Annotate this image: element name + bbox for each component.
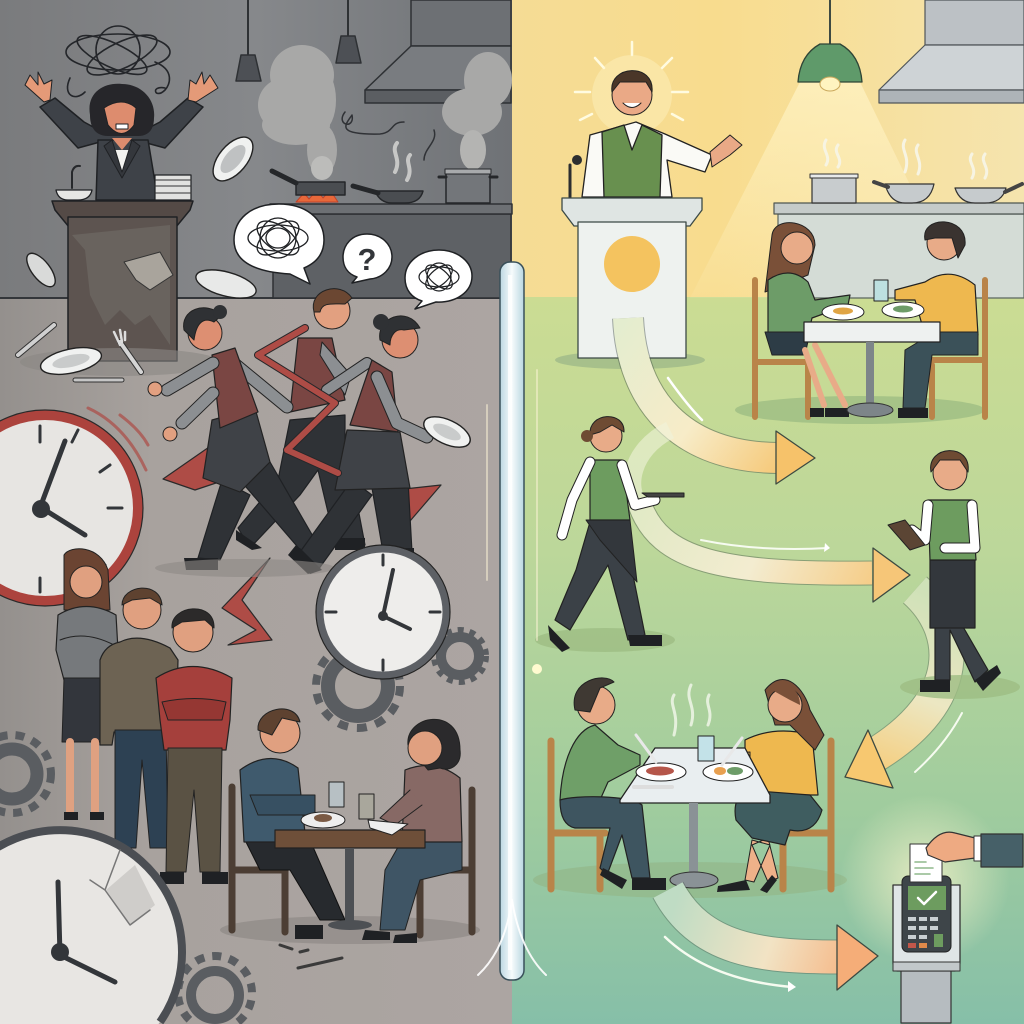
big red-rimmed clock (0, 408, 148, 606)
server taking orders (888, 451, 1020, 699)
cooking pot (439, 169, 497, 203)
glass divider tube (478, 262, 546, 980)
speech bubble: question mark (343, 234, 392, 283)
background: calm wall (512, 0, 1024, 300)
stressed staff, right (290, 314, 475, 574)
gears (0, 630, 486, 1022)
glow behind card terminal (840, 795, 1010, 965)
upset customer trio (56, 549, 232, 884)
kitchen counter, chaotic side (270, 204, 512, 298)
speech bubble: tangled thoughts (234, 204, 324, 284)
background: chaotic floor (0, 298, 512, 1024)
kitchen hood, chaotic side (365, 0, 511, 103)
stressed staff, middle (236, 289, 365, 550)
presenter with halo (570, 42, 742, 197)
smoke clouds (258, 45, 512, 180)
red lightning zigzag across staff (258, 328, 338, 473)
red triangles behind staff (163, 445, 441, 535)
burning pan (272, 171, 345, 202)
bright podium with sun emblem (555, 198, 705, 369)
process arrow 1 (628, 318, 815, 484)
background: calm floor (512, 297, 1024, 1024)
stressed manager (25, 72, 218, 200)
tangled scribble over manager (66, 26, 170, 97)
hand holding receipt (926, 832, 1023, 867)
light cone, calm side (690, 82, 965, 298)
walking server with tray (535, 417, 684, 652)
spilled fork and debris (280, 945, 342, 968)
process arrow 3 (845, 590, 962, 788)
broken clock, bottom left (0, 830, 182, 1024)
gray wall clock (316, 545, 450, 679)
background: chaotic wall (0, 0, 512, 300)
speech bubble: question mark: ? (358, 242, 376, 277)
process arrow 2 (632, 430, 910, 602)
seated couple, bottom (533, 678, 847, 898)
pendant lamps (236, 0, 361, 81)
process arrow 4 (665, 890, 878, 992)
pots and pans, calm side (810, 140, 1022, 203)
pendant lamp, calm side (798, 0, 862, 91)
scattered plates and cutlery (18, 130, 260, 380)
man in red sweater (156, 609, 232, 884)
seated couple, top (735, 222, 985, 424)
hood, calm side (879, 0, 1024, 103)
man in brown sweater (100, 588, 178, 848)
payment terminal with receipt (893, 844, 960, 1023)
speech bubble: small tangle (405, 250, 472, 309)
damaged podium (52, 201, 193, 361)
unhappy seated couple and table (220, 709, 480, 944)
steam lines and squiggle (342, 112, 435, 180)
frying pan (353, 186, 423, 203)
red lightning bolt near clock (222, 558, 272, 645)
stressed staff, left (148, 305, 320, 574)
kitchen counter, calm side (774, 203, 1024, 298)
cup and stacked plates (56, 166, 191, 200)
woman (56, 549, 118, 820)
